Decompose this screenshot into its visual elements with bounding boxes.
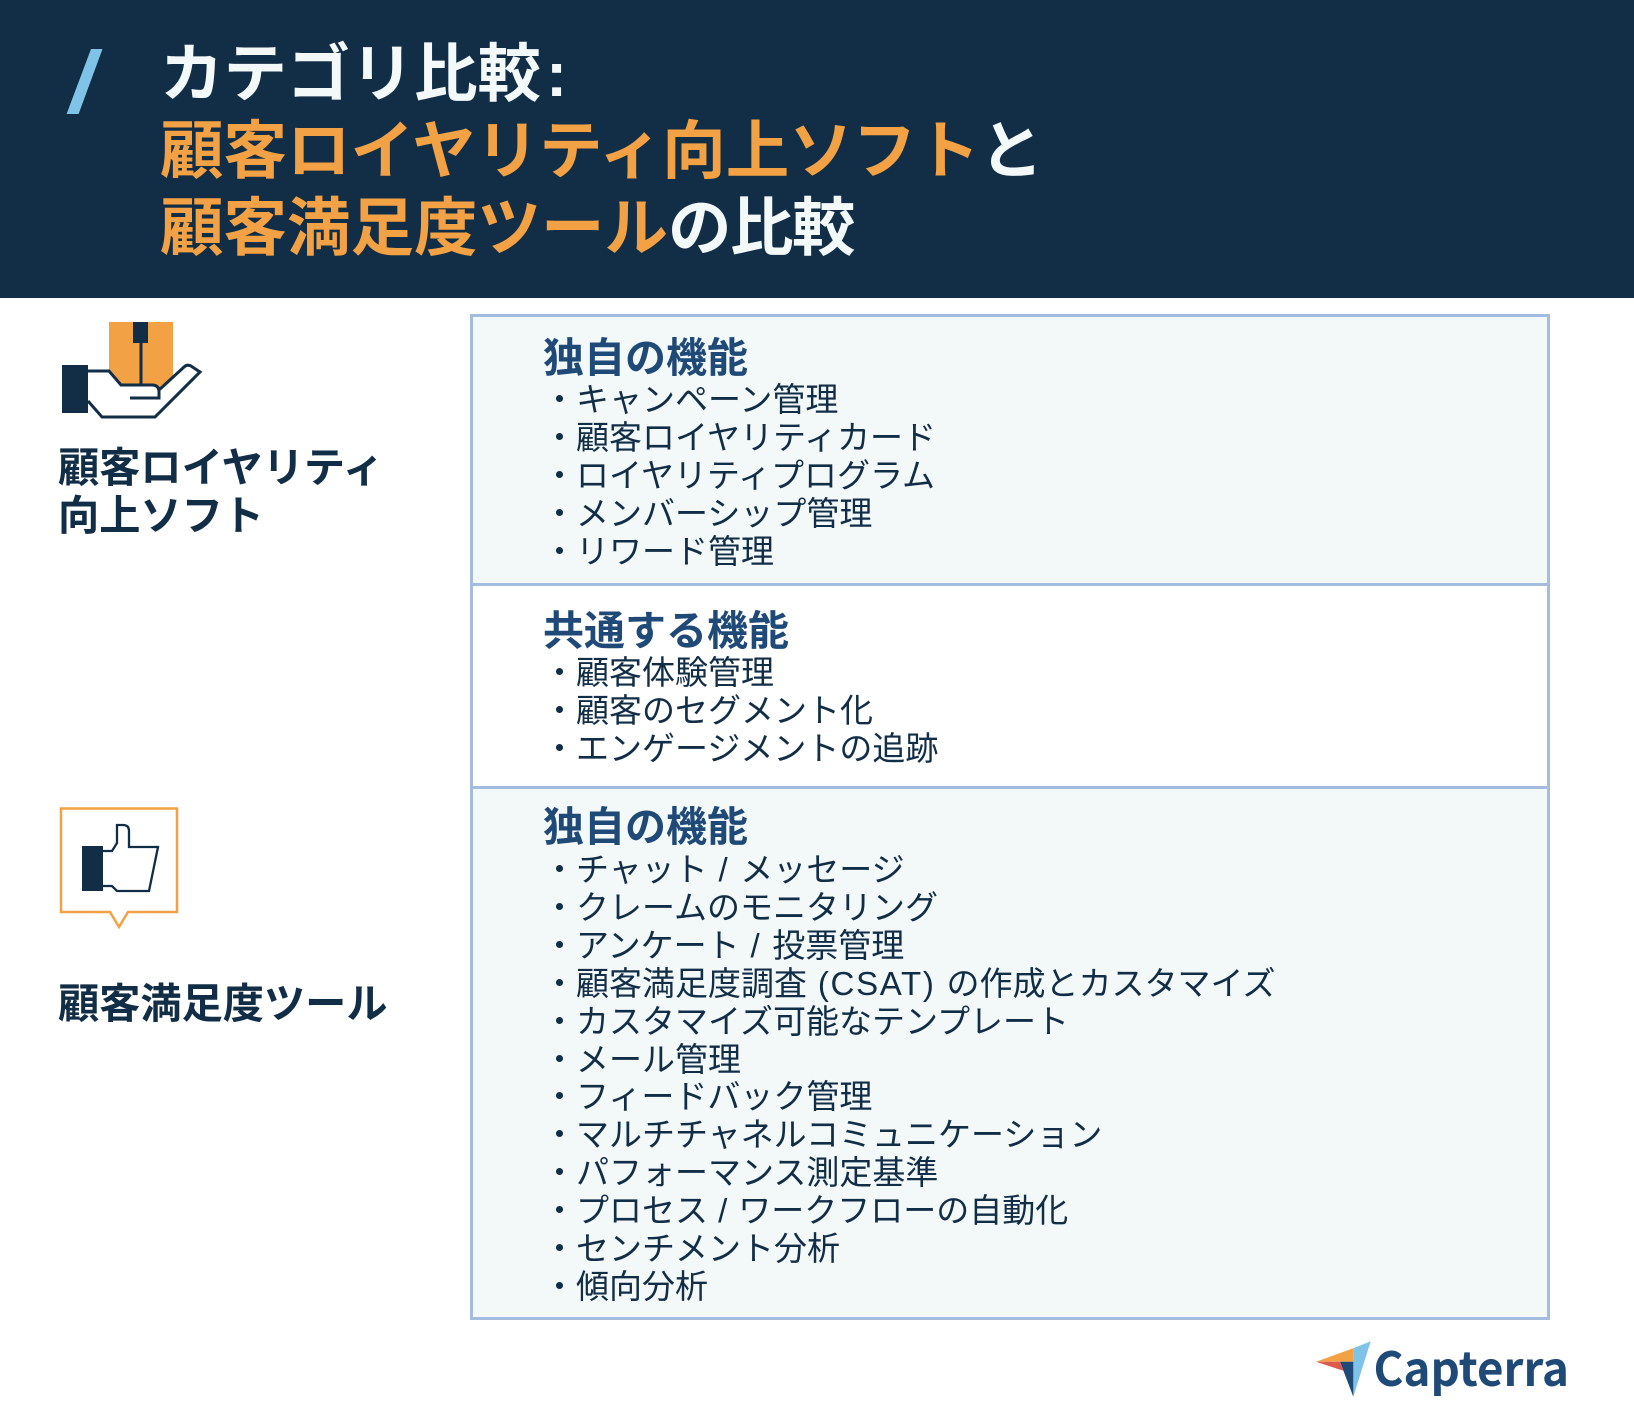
list: unique features 1	[543, 381, 936, 570]
list: unique features 2: ・顧客満足度調査 (CSAT) の作成とカスタマイズ	[543, 965, 1276, 1002]
list: unique features 1: ・顧客ロイヤリティカード	[543, 419, 936, 456]
list: unique features 2: ・カスタマイズ可能なテンプレート	[543, 1003, 1069, 1040]
list: unique features 2: ・マルチチャネルコミュニケーション	[543, 1116, 1102, 1153]
list: shared features: ・エンゲージメントの追跡	[543, 730, 938, 767]
label: satisfaction tools: 顧客満足度ツール	[58, 981, 388, 1027]
title: 顧客満足度ツールの比較	[160, 194, 854, 264]
label: loyalty software	[58, 445, 384, 539]
list: unique features 2: ・メール管理	[543, 1041, 741, 1078]
list: shared features: ・顧客体験管理	[543, 654, 774, 691]
list: unique features 2	[543, 851, 1276, 1305]
list: unique features 1: ・ロイヤリティプログラム	[543, 457, 935, 494]
title: カテゴリ比較:	[160, 40, 567, 110]
list: unique features 2: ・傾向分析	[543, 1268, 708, 1305]
list: shared features: ・顧客のセグメント化	[543, 692, 873, 729]
list: unique features 2: ・センチメント分析	[543, 1230, 840, 1267]
list: unique features 2: ・クレームのモニタリング	[543, 889, 938, 926]
list: unique features 1: ・リワード管理	[543, 533, 774, 570]
heading: unique features 1: 独自の機能	[543, 335, 748, 381]
panel: loyalty unique features	[470, 314, 1550, 586]
list: unique features 2: ・フィードバック管理	[543, 1078, 872, 1115]
header banner	[0, 0, 1634, 298]
heading: shared features: 共通する機能	[543, 608, 789, 654]
list: unique features 2: ・プロセス / ワークフローの自動化	[543, 1192, 1068, 1229]
panel: satisfaction unique features	[470, 786, 1550, 1320]
list: shared features	[543, 654, 938, 767]
title: 顧客ロイヤリティ向上ソフトと	[160, 117, 1043, 187]
heading: unique features 2: 独自の機能	[543, 804, 748, 850]
label: loyalty software: 顧客ロイヤリティ	[58, 445, 384, 491]
icon: thumbs up speech bubble	[60, 807, 178, 930]
list: unique features 1: ・キャンペーン管理	[543, 381, 838, 418]
list: unique features 1: ・メンバーシップ管理	[543, 495, 872, 532]
label: loyalty software: 向上ソフト	[58, 493, 264, 539]
title	[160, 40, 1043, 264]
icon: hand holding box	[62, 322, 202, 418]
panel: shared features	[470, 583, 1550, 789]
list: unique features 2: ・チャット / メッセージ	[543, 851, 905, 888]
icon: slash accent	[66, 49, 102, 114]
list: unique features 2: ・アンケート / 投票管理	[543, 927, 904, 964]
list: unique features 2: ・パフォーマンス測定基準	[543, 1154, 938, 1191]
